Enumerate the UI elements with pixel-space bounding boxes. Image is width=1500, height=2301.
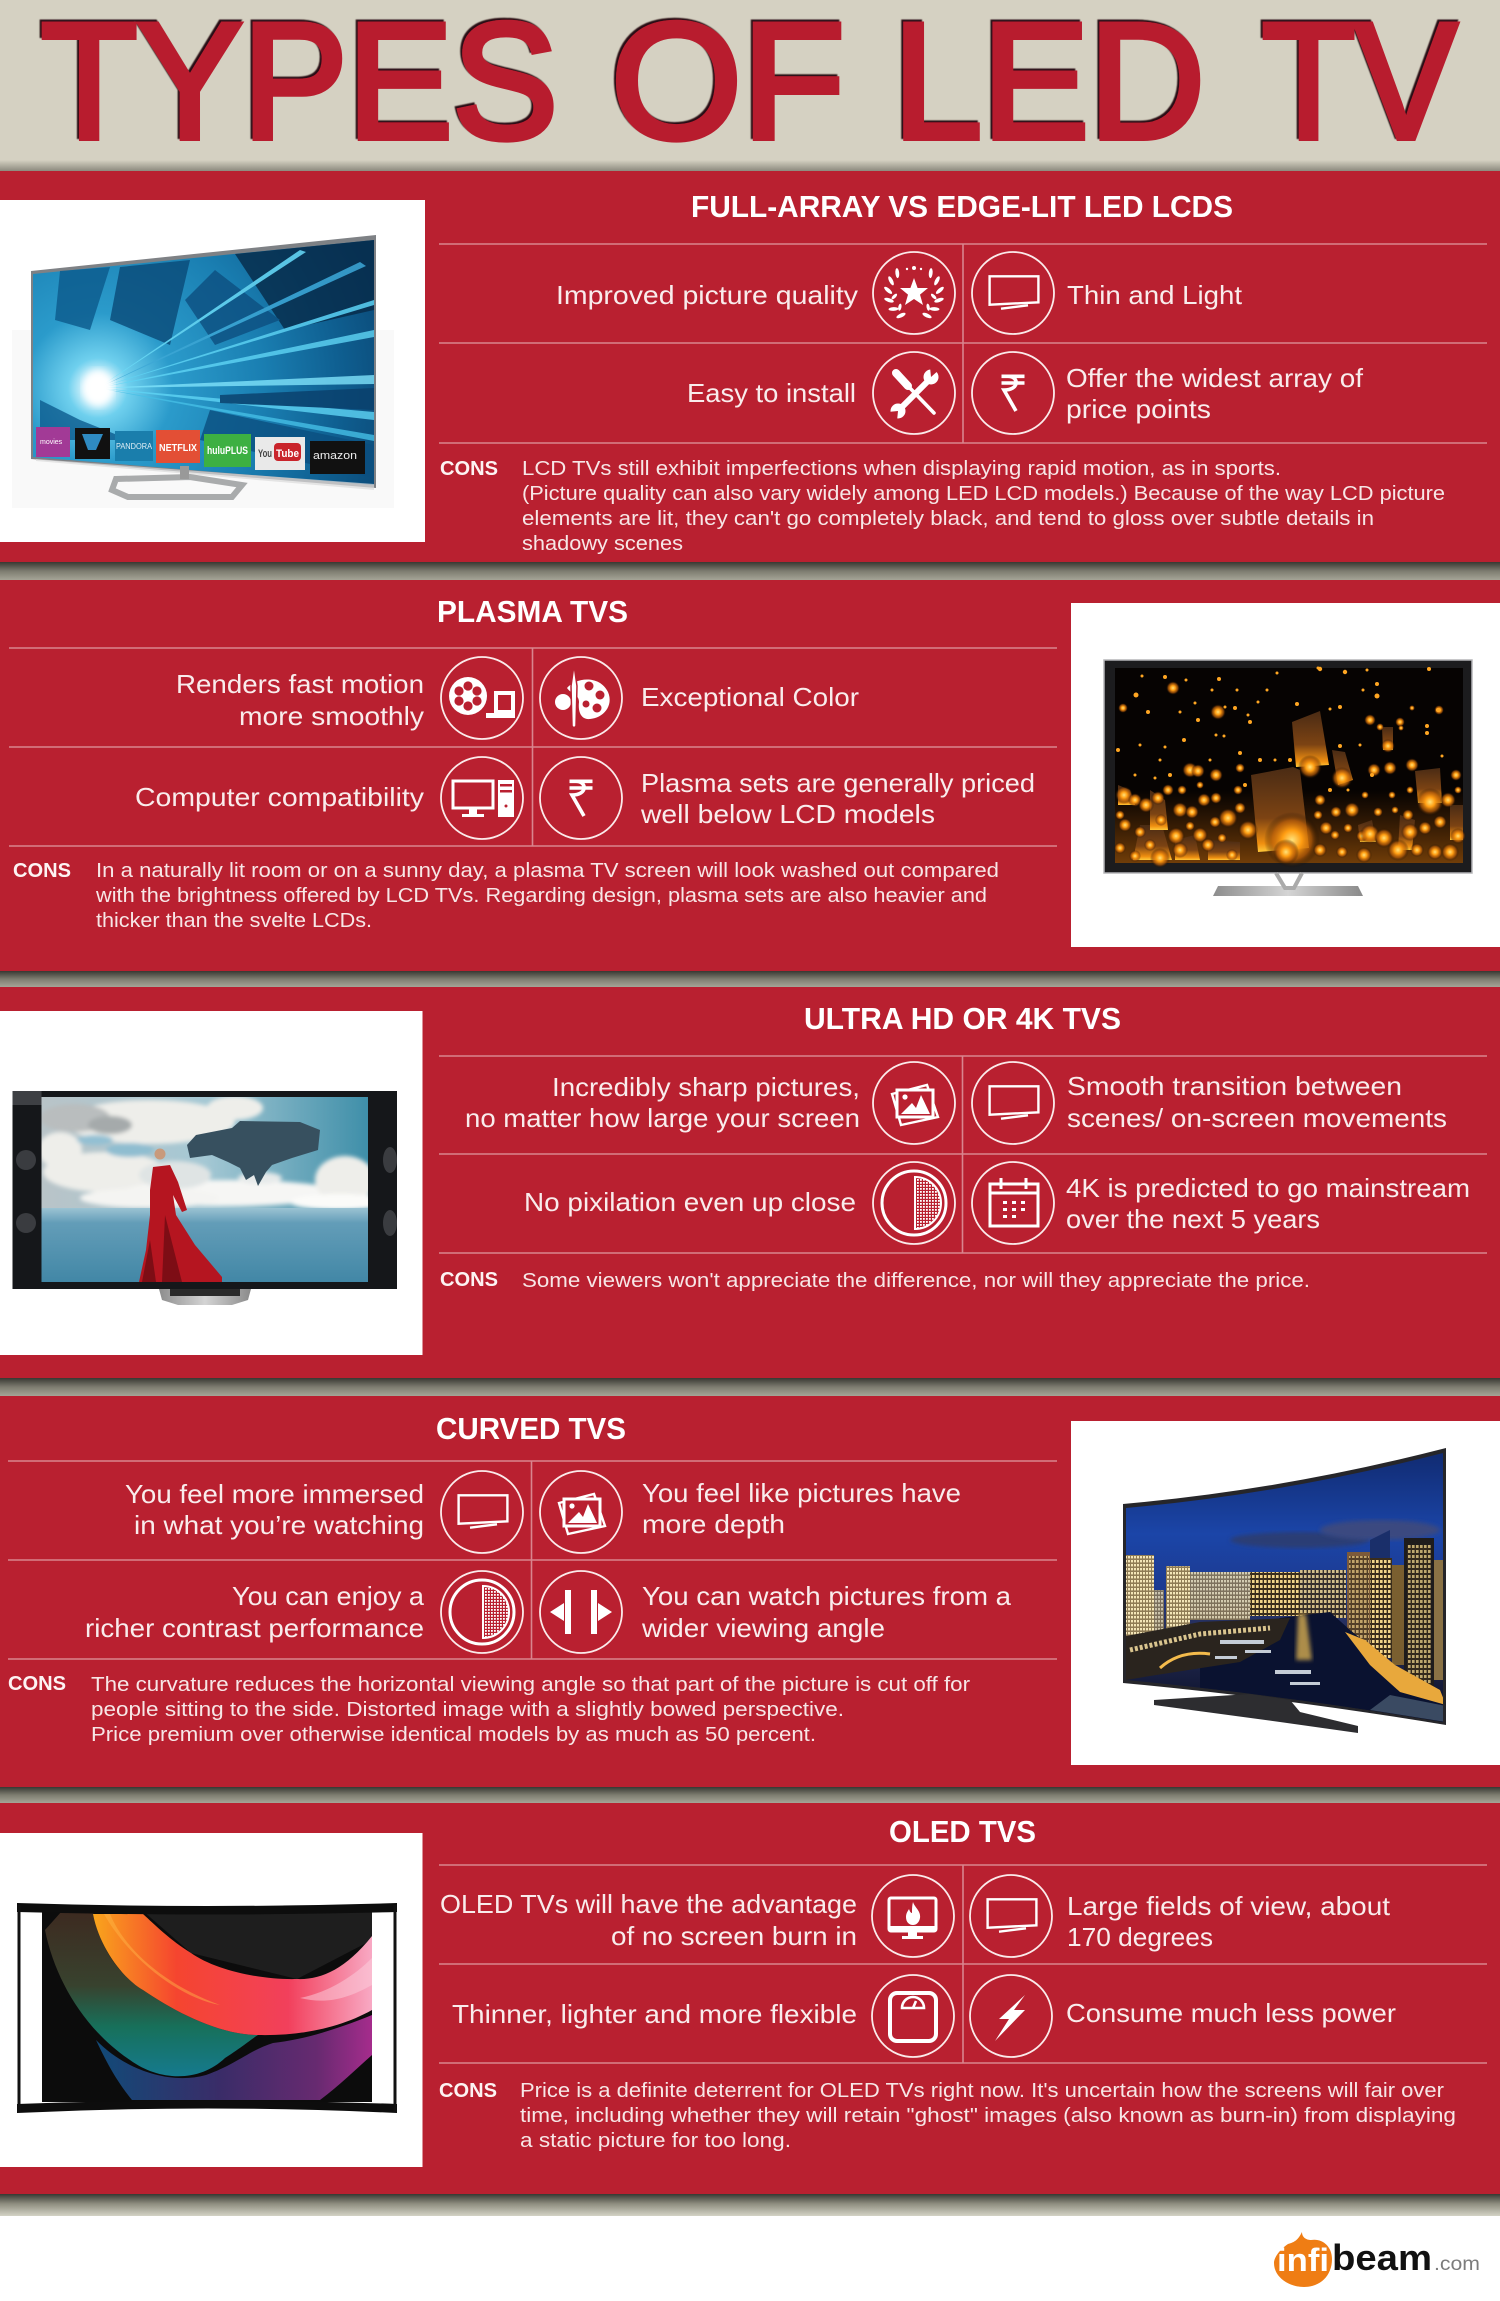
cons text: Price is a definite deterrent for OLED TVs right now. It's uncertain how the screens will fair over xyxy=(520,2080,1444,2102)
heading: PLASMA TVS xyxy=(437,594,628,629)
pro: 4k mainstream: 4K is predicted to go mainstream xyxy=(1066,1173,1470,1203)
pro: no screen burn in: of no screen burn in xyxy=(611,1921,857,1951)
cons label: CONS xyxy=(13,860,71,882)
cons text: Price premium over otherwise identical models by as much as 50 percent. xyxy=(91,1724,816,1746)
pro: wide field of view xyxy=(1067,1891,1391,1952)
pro: smooth transition: scenes/ on-screen movements xyxy=(1067,1103,1447,1133)
cons text: time, including whether they will retain "ghost" images (also known as burn-in) from displaying xyxy=(520,2105,1456,2127)
pro: renders fast motion: more smoothly xyxy=(239,701,424,731)
pro: renders fast motion xyxy=(176,669,424,731)
pro: 4k mainstream xyxy=(1066,1173,1470,1234)
pro: wider viewing angle: You can watch pictures from a xyxy=(642,1581,1012,1611)
icon: laurel star xyxy=(873,252,955,334)
panel: curved xyxy=(0,1396,1500,1803)
icon: pictures xyxy=(540,1471,622,1553)
icon: contrast xyxy=(441,1571,523,1653)
icon: burn-in monitor xyxy=(872,1875,954,1957)
cons text: thicker than the svelte LCDs. xyxy=(96,910,372,932)
pro: priced below LCD: Plasma sets are generally priced xyxy=(641,768,1035,798)
pro: richer contrast: richer contrast performance xyxy=(85,1613,424,1643)
shore xyxy=(1126,1618,1290,1680)
app tiles xyxy=(36,427,365,474)
cons text: shadowy scenes xyxy=(522,533,683,555)
icon: tv xyxy=(972,252,1054,334)
icon: pictures xyxy=(873,1062,955,1144)
icon: computer xyxy=(441,757,523,839)
pro: more depth: You feel like pictures have xyxy=(642,1478,961,1508)
cons text: people sitting to the side. Distorted image with a slightly bowed perspective. xyxy=(91,1699,844,1721)
photo: smart LED TV xyxy=(0,200,425,542)
cons text xyxy=(520,2080,1456,2152)
heading: OLED TVS xyxy=(889,1814,1036,1849)
pro: more immersed: You feel more immersed xyxy=(125,1479,424,1509)
logo: infibeam: .com xyxy=(1434,2254,1480,2275)
pro: no screen burn in xyxy=(440,1889,857,1951)
icon: tv xyxy=(970,1875,1052,1957)
cons label: CONS xyxy=(440,1269,498,1291)
lanterns xyxy=(1114,666,1466,868)
pro: smooth transition xyxy=(1067,1071,1447,1133)
pro: less power: Consume much less power xyxy=(1066,1998,1396,2028)
pro: richer contrast xyxy=(85,1581,425,1643)
pro: wide field of view: 170 degrees xyxy=(1067,1922,1213,1952)
icon: tools xyxy=(873,352,955,434)
app tiles: Tube xyxy=(276,448,299,460)
pro: more immersed xyxy=(125,1479,424,1540)
pro: widest array of price points: Offer the widest array of xyxy=(1066,363,1364,393)
pro: richer contrast: You can enjoy a xyxy=(232,1581,425,1611)
icon: rupee xyxy=(972,352,1054,434)
icon: lightning bolt xyxy=(970,1975,1052,2057)
cons label: CONS xyxy=(439,2080,497,2102)
pro: wider viewing angle xyxy=(641,1581,1012,1643)
panel: full-array vs edge-lit xyxy=(0,171,1500,580)
pro: renders fast motion: Renders fast motion xyxy=(176,669,424,699)
heading: ULTRA HD OR 4K TVS xyxy=(804,1001,1121,1036)
logo: infibeam xyxy=(1274,2232,1480,2287)
pro: wider viewing angle: wider viewing angle xyxy=(641,1613,885,1643)
heading: CURVED TVS xyxy=(436,1411,626,1446)
pro: easy to install: Easy to install xyxy=(687,378,856,408)
pro: priced below LCD: well below LCD models xyxy=(640,799,935,829)
pro: thin and light: Thin and Light xyxy=(1067,280,1243,310)
app tiles: You xyxy=(258,448,272,460)
pro: widest array of price points xyxy=(1066,363,1364,424)
cons text xyxy=(91,1674,970,1746)
app tiles: huluPLUS xyxy=(207,445,248,457)
cons text: The curvature reduces the horizontal viewing angle so that part of the picture is cut off for xyxy=(91,1674,970,1696)
pro: exceptional color: Exceptional Color xyxy=(641,682,859,712)
icon: rupee xyxy=(540,757,622,839)
pro: widest array of price points: price points xyxy=(1066,394,1211,424)
app tiles: amazon xyxy=(313,450,357,462)
panel: ultra hd xyxy=(0,987,1500,1396)
panel: plasma xyxy=(0,580,1500,987)
icon: film reel xyxy=(441,657,523,739)
photo: curved TV with city xyxy=(1071,1421,1500,1765)
cons text xyxy=(522,458,1445,555)
pro: more immersed: in what you’re watching xyxy=(134,1510,424,1540)
pro: no pixilation: No pixilation even up close xyxy=(524,1187,856,1217)
pro: priced below LCD xyxy=(640,768,1035,829)
pro: improved picture quality: Improved picture quality xyxy=(556,280,858,310)
logo: infibeam: infi xyxy=(1277,2242,1329,2278)
speakers xyxy=(16,1147,397,1236)
icon: viewing angle arrows xyxy=(540,1571,622,1653)
pro: sharp pictures: Incredibly sharp pictures, xyxy=(552,1072,860,1102)
photo: plasma TV with lanterns xyxy=(1071,603,1500,947)
pro: thinner and lighter: Thinner, lighter and more flexible xyxy=(452,1999,857,2029)
cons text: a static picture for too long. xyxy=(520,2130,791,2152)
pro: more depth xyxy=(642,1478,961,1539)
panel: oled xyxy=(0,1803,1500,2216)
floating island xyxy=(187,1121,320,1186)
cons text: LCD TVs still exhibit imperfections when displaying rapid motion, as in sports. xyxy=(522,458,1281,480)
cons label: CONS xyxy=(440,458,498,480)
cons text: In a naturally lit room or on a sunny day, a plasma TV screen will look washed out compared xyxy=(96,860,999,882)
header background xyxy=(0,0,1500,172)
icon: tv xyxy=(972,1062,1054,1144)
icon: contrast xyxy=(873,1162,955,1244)
cons text: (Picture quality can also vary widely among LED LCD models.) Because of the way LCD picture xyxy=(522,483,1445,505)
app tiles: NETFLIX xyxy=(159,443,197,454)
photo: 4K TV with woman in red dress xyxy=(0,1011,422,1355)
app tiles: PANDORA xyxy=(116,442,153,451)
logo: infibeam: beam xyxy=(1332,2237,1432,2278)
pro: more depth: more depth xyxy=(642,1509,785,1539)
icon: tv xyxy=(441,1471,523,1553)
pro: sharp pictures xyxy=(465,1072,860,1133)
pro: wide field of view: Large fields of view, about xyxy=(1067,1891,1391,1921)
woman xyxy=(139,1148,222,1282)
pro: smooth transition: Smooth transition between xyxy=(1067,1071,1402,1101)
heading: FULL-ARRAY VS EDGE-LIT LED LCDS xyxy=(691,189,1233,224)
photo: OLED TV xyxy=(0,1833,422,2167)
cons text: elements are lit, they can't go completely black, and tend to gloss over subtle details in xyxy=(522,508,1374,530)
icon: palette xyxy=(540,657,622,739)
cons text: Some viewers won't appreciate the difference, nor will they appreciate the price. xyxy=(522,1270,1310,1292)
pro: computer compatibility: Computer compatibility xyxy=(135,782,424,812)
icon: calendar xyxy=(972,1162,1054,1244)
pro: 4k mainstream: over the next 5 years xyxy=(1066,1204,1320,1234)
pro: no screen burn in: OLED TVs will have the advantage xyxy=(440,1889,857,1919)
icon: weighing scale xyxy=(872,1975,954,2057)
cons label: CONS xyxy=(8,1673,66,1695)
water xyxy=(1200,1612,1446,1730)
pro: sharp pictures: no matter how large your screen xyxy=(465,1103,860,1133)
title xyxy=(41,0,1457,173)
cons text xyxy=(95,860,999,932)
cons text: with the brightness offered by LCD TVs. Regarding design, plasma sets are also heavier and xyxy=(95,885,987,907)
app tiles: movies xyxy=(40,439,63,446)
